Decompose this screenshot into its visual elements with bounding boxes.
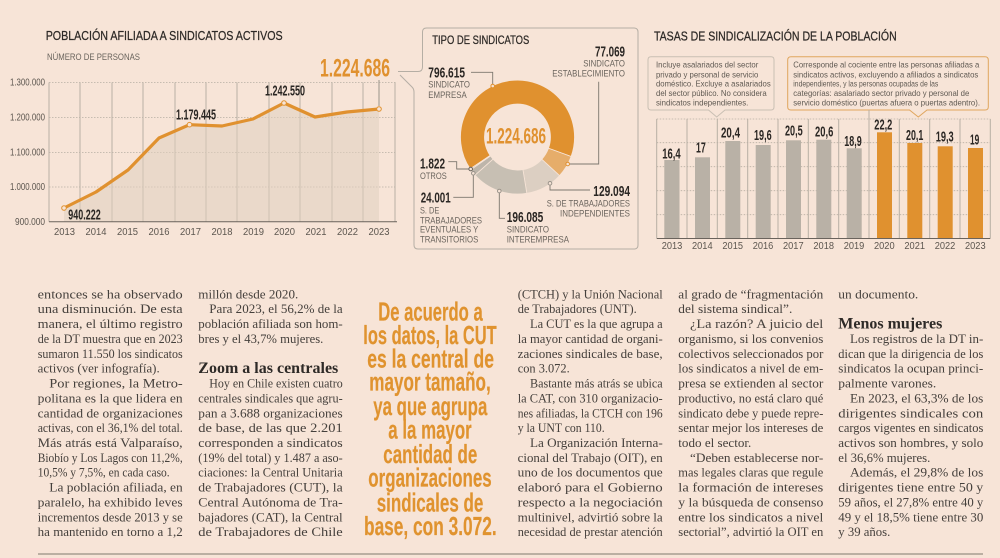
text block: column 4: productivo, no está claro qué xyxy=(678,391,824,405)
highlighted total 2023: 1.224.686 xyxy=(320,55,390,83)
bar x axis years: 2020 xyxy=(874,241,895,252)
bar values: 22,2 xyxy=(874,116,892,133)
text block: column 2: Para 2023, el 56,2% de la xyxy=(209,302,343,316)
text block: column 3: de Trabajadores (UNT). xyxy=(518,302,637,316)
label: trabajadores independientes: INDEPENDIENTES xyxy=(560,209,630,220)
callout: grey note: privado y personal de servicio xyxy=(656,69,758,79)
text block: column 1: politana es la que lidera en xyxy=(38,391,183,405)
text block: column 3: necesidad de prestar atención xyxy=(518,525,663,539)
text block: column 5: En 2023, el 63,3% de los xyxy=(850,391,983,405)
text block: column 5 xyxy=(838,287,984,539)
text block: column 5: el 36,6% mujeres. xyxy=(838,451,930,465)
text block: column 4: colectivos seleccionados por xyxy=(678,347,824,361)
panel outline with pointer xyxy=(398,28,638,249)
text block: column 5: cargos vigentes en sindicatos xyxy=(838,421,983,435)
pull quote: organizaciones xyxy=(368,463,492,493)
bar x axis years: 2016 xyxy=(753,241,774,252)
text block: column 2: pan a 3.688 organizaciones xyxy=(198,406,343,420)
bar values: 19,3 xyxy=(936,129,954,146)
bar x axis years: 2018 xyxy=(813,241,834,252)
text block: column 3: La CUT es la que agrupa a xyxy=(530,317,663,331)
bar x axis years: 2022 xyxy=(935,241,956,252)
text block: column 3: respecto a la negociación xyxy=(518,496,663,510)
label: sindicato establecimiento: ESTABLECIMIENTO xyxy=(552,69,625,80)
pull quote: cantidad de xyxy=(383,439,477,469)
text block: column 5: un documento. xyxy=(838,287,918,301)
heading: población afiliada: POBLACIÓN AFILIADA A SINDICATOS ACTIVOS xyxy=(46,28,283,43)
text block: column 4: mas legales claras que regule xyxy=(678,466,824,480)
line chart plot xyxy=(49,80,397,222)
bar values: 20,6 xyxy=(815,124,833,141)
label: otros: 1.822 xyxy=(420,155,445,172)
callout: grey note: sindicatos independientes. xyxy=(656,98,748,108)
text block: column 1: activas, con el 36,1% del total. xyxy=(38,421,183,435)
x axis years xyxy=(54,227,390,238)
text block: column 3: zaciones sindicales de base, xyxy=(518,347,663,361)
text block: column 3: la CAT, con 310 organizacio- xyxy=(518,391,663,405)
callout: grey note: del sector público. No considera xyxy=(656,88,767,98)
text block: column 3: la mayor cantidad de organi- xyxy=(518,332,663,346)
callout: orange note: categorías: asalariado sector privado y personal de xyxy=(793,88,969,98)
callout: orange note: independientes, y las personas ocupadas de las xyxy=(793,79,938,89)
text block: column 2: ciaciones: la Central Unitaria xyxy=(198,466,343,480)
data labels xyxy=(68,83,305,223)
text block: column 4: “Deben establecerse nor- xyxy=(690,451,823,465)
leader lines xyxy=(448,72,599,218)
panel: tipo de sindicatos donut xyxy=(398,28,638,249)
label: sindicato empresa: SINDICATO xyxy=(428,80,470,91)
donut total: 1.224.686 xyxy=(486,123,546,148)
y axis labels: 1.300.000 xyxy=(10,78,45,89)
data labels: 1.242.550 xyxy=(265,83,305,100)
subheading: menos mujeres: Menos mujeres xyxy=(838,315,942,332)
callout: grey note: doméstico. Excluye a asalariados xyxy=(656,79,771,89)
label: trabajadores eventuales y transitorios: S. DE xyxy=(420,205,439,216)
bar values: 16,4 xyxy=(662,145,681,162)
text block: column 1: 10,5% y 7,5%, en cada caso. xyxy=(38,466,170,480)
text block: column 4: la formación de intereses xyxy=(678,481,823,495)
pull quote: sindicales de xyxy=(377,488,483,518)
bar x axis years: 2017 xyxy=(783,241,804,252)
text block: column 1 xyxy=(38,287,183,539)
text block: column 1: incrementos desde 2013 y se xyxy=(38,510,183,524)
text block: column 4: presa se extienden al sector xyxy=(678,376,824,390)
text block: column 1: de la DT muestra que en 2023 xyxy=(38,332,183,346)
text block: column 2: Central Autónoma de Tra- xyxy=(198,496,343,510)
text block: column 2: Hoy en Chile existen cuatro xyxy=(209,376,343,390)
x axis years: 2014 xyxy=(86,227,107,238)
text block: column 4: sentar mejor los intereses de xyxy=(678,421,824,435)
panel: población afiliada line chart xyxy=(10,28,397,238)
data labels: 940.222 xyxy=(68,206,101,223)
text block: column 3: Bastante más atrás se ubica xyxy=(530,376,663,390)
text block: column 1: una disminución. De esta xyxy=(38,302,183,316)
x axis years: 2023 xyxy=(368,227,390,238)
x axis years: 2019 xyxy=(243,227,264,238)
text block: column 1: entonces se ha observado xyxy=(38,287,183,301)
panel: tasas de sindicalización bar chart xyxy=(648,29,990,252)
x axis years: 2022 xyxy=(337,227,358,238)
label: trabajadores independientes xyxy=(547,183,630,220)
text block: column 3: elaboró para el Gobierno xyxy=(518,481,663,495)
text block: column 2 xyxy=(198,287,343,539)
text block: column 5: 49 y el 18,5% tiene entre 30 xyxy=(838,510,983,524)
text block: column 1: ha mantenido en torno a 1,2 xyxy=(38,525,183,539)
bars xyxy=(657,132,990,238)
callout: orange note xyxy=(788,57,988,117)
x axis years: 2013 xyxy=(54,227,75,238)
bar values: 20,5 xyxy=(785,123,803,140)
text block: column 4: ¿La razón? A juicio del xyxy=(690,317,824,331)
donut chart xyxy=(461,80,575,194)
callout: grey note: Incluye asalariados del sector xyxy=(656,60,758,70)
text block: column 5: dirigentes tiene entre 50 y xyxy=(838,481,984,495)
text block: column 4: sectorial”, advirtió la OIT en xyxy=(678,525,824,539)
pull quote: base, con 3.072. xyxy=(364,511,497,541)
bar values xyxy=(662,116,979,162)
text block: column 3: cional del Trabajo (OIT), en xyxy=(518,451,663,465)
text block: column 3: (CTCH) y la Unión Nacional xyxy=(518,287,663,301)
text block: column 1: sumaron 11.550 los sindicatos xyxy=(38,347,183,361)
pull quote: ya que agrupa xyxy=(373,391,488,421)
bar values: 17 xyxy=(696,139,706,156)
text block: column 1: Biobío y Los Lagos con 11,2%, xyxy=(38,451,183,465)
text block: column 5: dirigentes sindicales con xyxy=(838,406,984,420)
text block: column 3: La Organización Interna- xyxy=(530,436,663,450)
label: otros: OTROS xyxy=(420,171,447,182)
text block: column 4: al grado de “fragmentación xyxy=(678,287,824,301)
label: trabajadores independientes: S. DE TRABAJADORES xyxy=(547,199,630,210)
text block: column 2: de base, de las que 2.201 xyxy=(198,421,343,435)
text block: column 5: dican que la dirigencia de los xyxy=(838,347,983,361)
heading: tipo de sindicatos: TIPO DE SINDICATOS xyxy=(432,35,530,47)
subtitle: número de personas: NÚMERO DE PERSONAS xyxy=(47,52,140,63)
bar x axis years: 2021 xyxy=(904,241,925,252)
text block: column 2: centrales sindicales que agru- xyxy=(198,391,343,405)
label: sindicato empresa xyxy=(428,65,470,101)
text block: column 2: millón desde 2020. xyxy=(198,287,298,301)
bar x axis years: 2023 xyxy=(965,241,986,252)
text block: column 4: sindicato debe y puede repre- xyxy=(678,406,823,420)
callout: orange note: servicio doméstico (puertas afuera o puertas adentro). xyxy=(793,98,980,108)
text block: column 2: bajadores (CAT), la Central xyxy=(198,510,343,524)
label: sindicato empresa: 796.615 xyxy=(428,65,465,82)
label: sindicato establecimiento: 77.069 xyxy=(595,44,625,61)
text block: column 3 xyxy=(518,287,663,539)
pull quote: mayor tamaño, xyxy=(369,367,491,397)
text block: column 5: activos son hombres, y solo xyxy=(838,436,983,450)
x axis years: 2016 xyxy=(148,227,170,238)
bar values: 18,9 xyxy=(844,133,862,150)
text block: column 4: todo el sector. xyxy=(678,436,751,450)
text block: column 4: entre los sindicatos a nivel xyxy=(678,510,824,524)
bar x axis years xyxy=(662,241,986,252)
x axis years: 2017 xyxy=(180,227,201,238)
label: trabajadores eventuales y transitorios: TRABAJADORES xyxy=(420,215,482,226)
label: sindicato interempresa: INTEREMPRESA xyxy=(507,235,570,246)
y axis labels: 1.200.000 xyxy=(10,113,45,124)
text block: column 5: Los registros de la DT in- xyxy=(850,332,983,346)
bar values: 19,6 xyxy=(754,127,772,144)
text block: column 1: cantidad de organizaciones xyxy=(38,406,183,420)
pull quote: los datos, la CUT xyxy=(363,320,497,350)
bar x axis years: 2014 xyxy=(692,241,713,252)
text block: column 2: de Trabajadores (CUT), la xyxy=(198,481,343,495)
label: trabajadores eventuales y transitorios: TRANSITORIOS xyxy=(420,235,478,246)
callout: grey note xyxy=(648,57,774,117)
label: trabajadores eventuales y transitorios: 24.001 xyxy=(421,190,451,207)
callout: orange note: sindicatos activos, excluyendo a afiliados a sindicatos xyxy=(793,69,978,79)
label: sindicato interempresa: 196.085 xyxy=(507,209,543,226)
text block: column 5: Además, el 29,8% de los xyxy=(850,466,983,480)
pull quote: es la central de xyxy=(367,343,494,373)
text block: column 4: y la búsqueda de consenso xyxy=(678,496,823,510)
text block: column 4: los sindicatos a nivel de em- xyxy=(678,362,823,376)
label: otros xyxy=(420,155,447,182)
text block: column 3: multinivel, advirtió sobre la xyxy=(518,510,663,524)
bar x axis years: 2015 xyxy=(722,241,743,252)
label: sindicato interempresa xyxy=(507,209,570,246)
x axis years: 2020 xyxy=(274,227,295,238)
x axis years: 2015 xyxy=(117,227,138,238)
subheading: zoom a las centrales: Zoom a las centrales xyxy=(198,360,338,377)
label: sindicato establecimiento xyxy=(552,44,625,80)
text block: column 5: palmente varones. xyxy=(838,376,936,390)
label: sindicato empresa: EMPRESA xyxy=(428,90,467,101)
x axis years: 2018 xyxy=(212,227,233,238)
text block: column 1: activos (ver infografía). xyxy=(38,362,160,376)
text block: column 3: nes afiliadas, la CTCH con 196 xyxy=(518,406,663,420)
bar values: 19 xyxy=(970,131,979,148)
text block: column 2: población afiliada son hom- xyxy=(198,317,343,331)
text block: column 1: manera, el último registro xyxy=(38,317,183,331)
y axis labels xyxy=(10,78,45,228)
text block: column 4: del sistema sindical”. xyxy=(678,302,792,316)
heading: tasas de sindicalización: TASAS DE SINDICALIZACIÓN DE LA POBLACIÓN xyxy=(654,29,897,44)
pull quote xyxy=(363,297,497,541)
text block: column 5: y 39 años. xyxy=(838,525,890,539)
text block: column 4: organismo, si los convenios xyxy=(678,332,823,346)
text block: column 2: bres y el 43,7% mujeres. xyxy=(198,332,323,346)
text block: column 3: uno de los documentos que xyxy=(518,466,663,480)
text block: column 1: La población afiliada, en xyxy=(49,481,183,495)
bar values: 20,4 xyxy=(721,124,740,141)
label: trabajadores eventuales y transitorios: EVENTUALES Y xyxy=(420,225,479,236)
callout: orange note: Corresponde al cociente entre las personas afiliadas a xyxy=(793,60,979,70)
bar values: 20,1 xyxy=(906,127,923,144)
text block: column 3: con 3.072. xyxy=(518,362,570,376)
y axis labels: 900.000 xyxy=(15,217,45,228)
label: trabajadores eventuales y transitorios xyxy=(420,190,482,246)
y axis labels: 1.000.000 xyxy=(10,182,45,193)
text block: column 5: sindicatos la ocupan princi- xyxy=(838,362,983,376)
bar x axis years: 2019 xyxy=(844,241,865,252)
pull quote: De acuerdo a xyxy=(378,297,483,327)
y axis labels: 1.100.000 xyxy=(10,148,45,159)
text block: column 4 xyxy=(678,287,824,539)
text block: column 1: Por regiones, la Metro- xyxy=(49,376,183,390)
pull quote: a la mayor xyxy=(388,414,472,444)
bar chart grid xyxy=(657,110,990,238)
text block: column 2: corresponden a sindicatos xyxy=(198,436,343,450)
data labels: 1.179.445 xyxy=(176,106,216,123)
label: sindicato interempresa: SINDICATO xyxy=(507,225,549,236)
bar x axis years: 2013 xyxy=(662,241,683,252)
text block: column 1: paralelo, ha exhibido leves xyxy=(38,496,183,510)
text block: column 2: de Trabajadores de Chile xyxy=(198,525,343,539)
text block: column 5: 59 años, el 27,8% entre 40 y xyxy=(838,496,984,510)
text block: column 2: (19% del total) y 1.487 a aso- xyxy=(198,451,343,465)
x axis years: 2021 xyxy=(306,227,327,238)
text block: column 3: y la UNT con 110. xyxy=(518,421,605,435)
label: trabajadores independientes: 129.094 xyxy=(593,183,630,200)
text block: column 1: Más atrás está Valparaíso, xyxy=(38,436,183,450)
label: sindicato establecimiento: SINDICATO xyxy=(583,59,625,70)
